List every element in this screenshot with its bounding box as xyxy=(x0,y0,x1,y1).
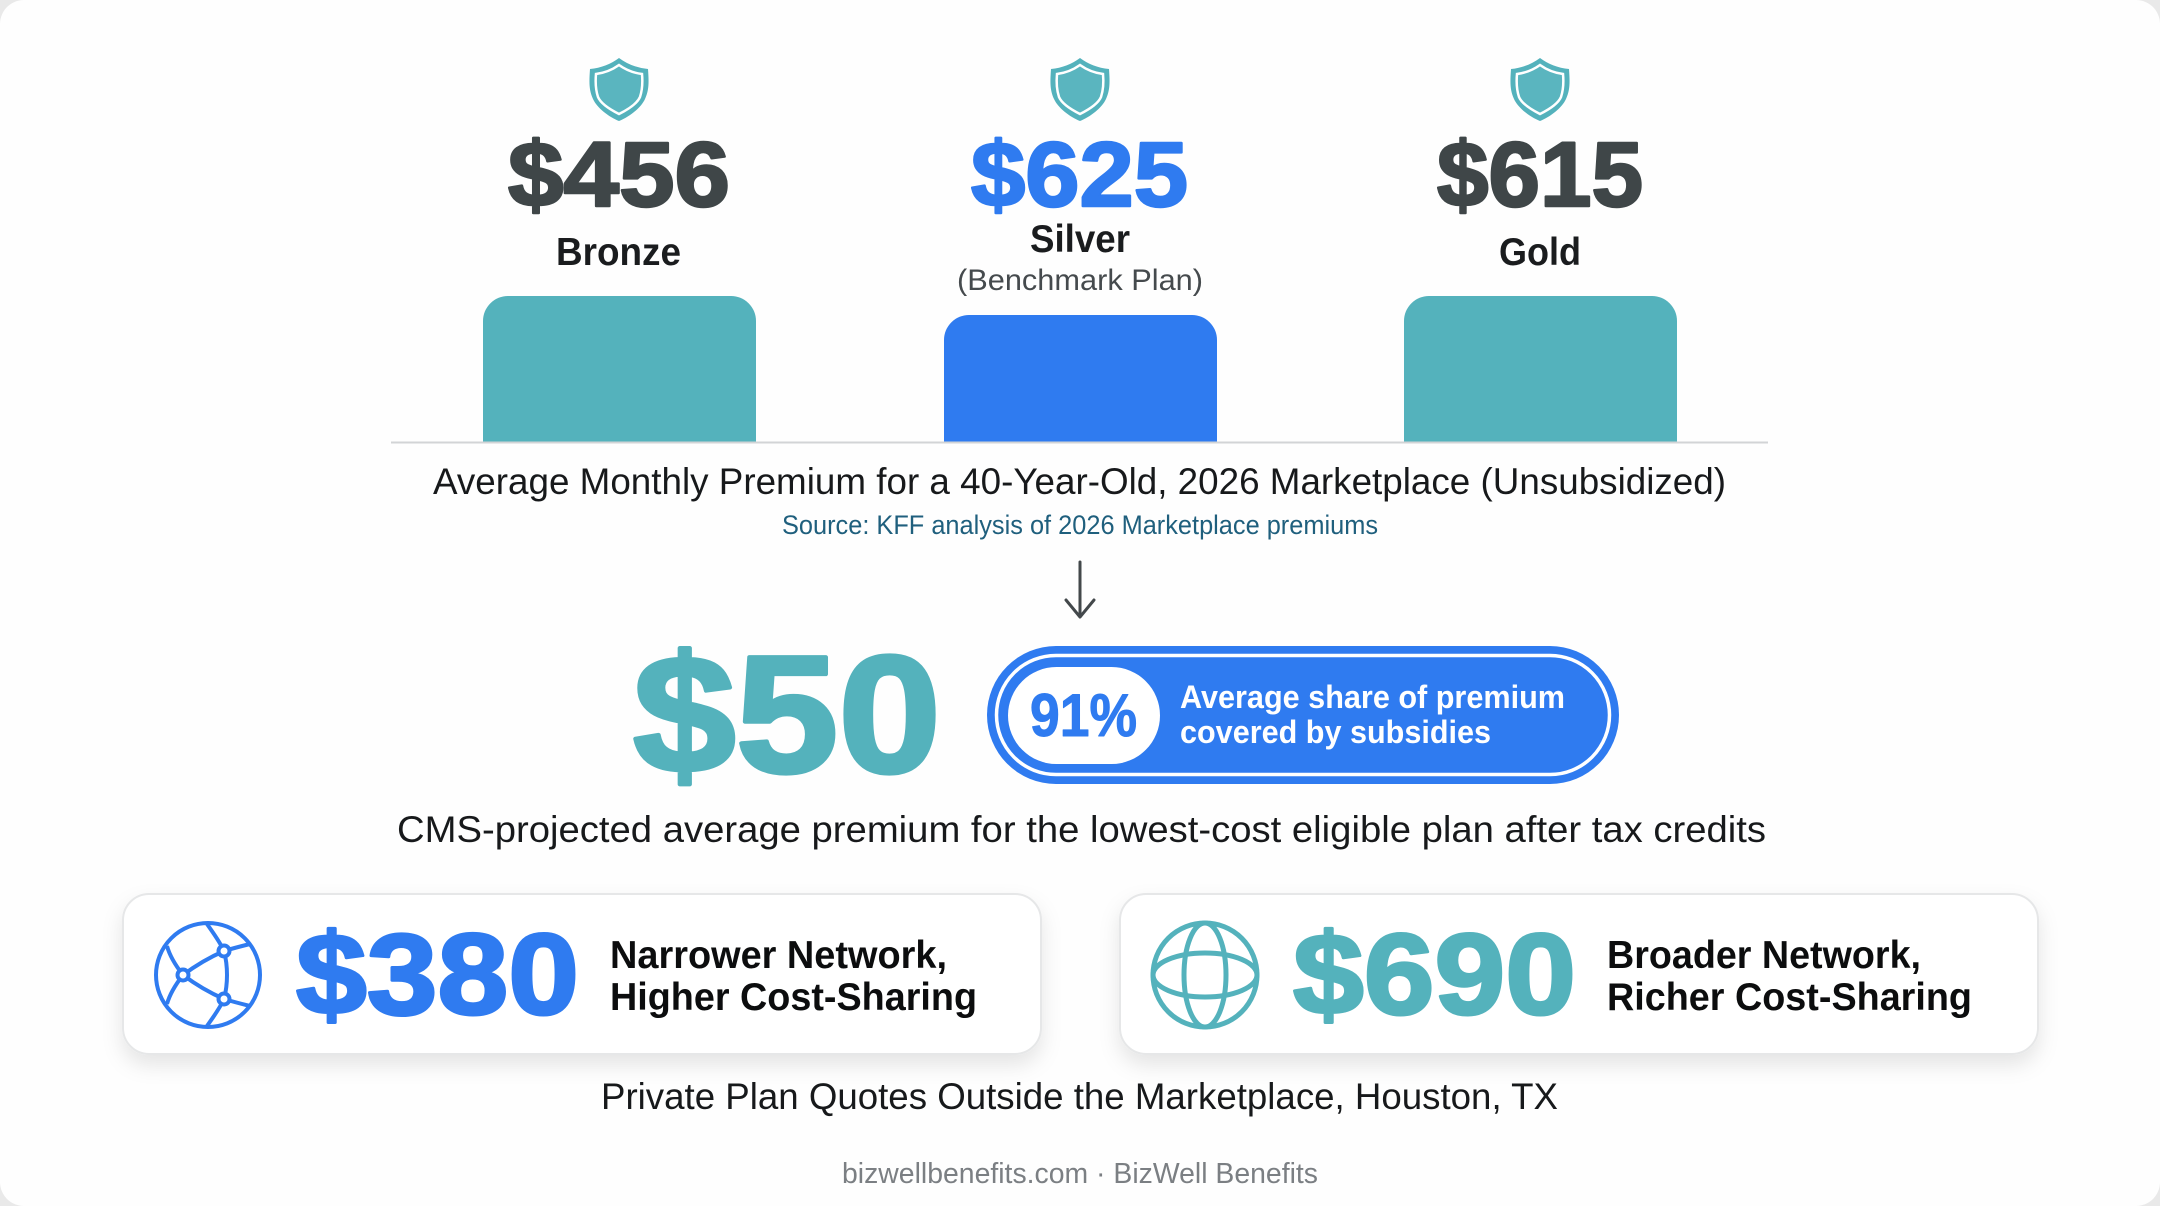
card label: Narrower Network, xyxy=(610,934,947,977)
cards caption: Private Plan Quotes Outside the Marketplace, Houston, TX xyxy=(601,1076,1558,1117)
card label xyxy=(610,934,977,1019)
$690 price: $690 xyxy=(1293,911,1576,1039)
Bronze price: $456 xyxy=(508,124,730,226)
card label: Richer Cost-Sharing xyxy=(1607,976,1972,1019)
Bronze bar xyxy=(483,296,756,443)
icon: Bronze shield xyxy=(589,58,649,121)
panel: Gold tier xyxy=(1404,58,1677,443)
icon: globe xyxy=(1153,923,1257,1027)
Bronze label: Bronze xyxy=(556,231,681,274)
Silver label: Silver xyxy=(1030,218,1130,261)
Gold label: Gold xyxy=(1499,231,1581,274)
card label xyxy=(1607,934,1972,1019)
panel: $690 broader network card xyxy=(1120,894,2038,1054)
icon: Gold shield xyxy=(1510,58,1570,121)
card label: Broader Network, xyxy=(1607,934,1921,977)
chart caption: Average Monthly Premium for a 40-Year-Old, 2026 Marketplace (Unsubsidized) xyxy=(433,461,1726,502)
icon: network globe xyxy=(156,923,260,1027)
Silver bar xyxy=(944,315,1217,443)
91% badge: 91% xyxy=(1030,682,1137,749)
91% badge xyxy=(1008,667,1160,764)
pill text: covered by subsidies xyxy=(1180,714,1491,750)
card label: Higher Cost-Sharing xyxy=(610,976,977,1019)
big number: $50: $50 xyxy=(633,622,941,808)
$50 caption: CMS-projected average premium for the lowest-cost eligible plan after tax credits xyxy=(397,809,1766,850)
panel: Bronze tier xyxy=(483,58,756,443)
icon: Silver shield xyxy=(1050,58,1110,121)
footer: bizwellbenefits.com · BizWell Benefits xyxy=(842,1158,1318,1190)
callout: 91% subsidy pill xyxy=(987,646,1619,784)
arrow: down xyxy=(1066,562,1094,617)
bar chart: average monthly premium by metal tier xyxy=(391,58,1768,444)
source note: Source: KFF analysis of 2026 Marketplace premiums xyxy=(782,510,1378,540)
pill text: Average share of premium xyxy=(1180,679,1565,715)
$380 price: $380 xyxy=(296,911,579,1039)
Silver price: $625 xyxy=(971,124,1188,226)
panel: Silver tier xyxy=(944,58,1217,443)
Gold bar xyxy=(1404,296,1677,443)
panel: $380 narrower network card xyxy=(123,894,1041,1054)
pill text xyxy=(1180,679,1565,750)
Gold price: $615 xyxy=(1437,124,1643,226)
Benchmark plan note: (Benchmark Plan) xyxy=(957,264,1203,297)
